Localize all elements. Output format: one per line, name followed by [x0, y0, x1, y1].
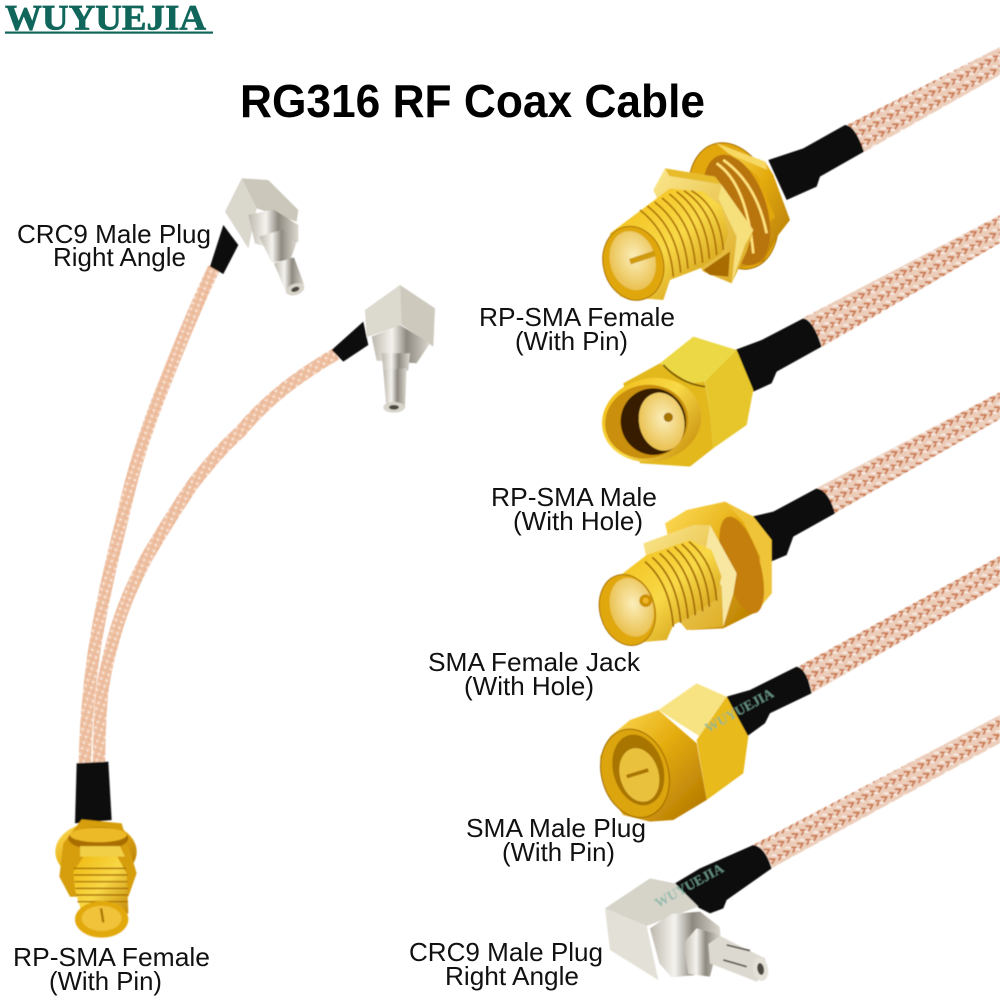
label: RP-SMA male [491, 482, 657, 536]
heat shrink sleeve [727, 667, 812, 737]
label: RP-SMA male: (With Hole) [513, 506, 643, 536]
label: SMA female jack: SMA Female Jack [428, 647, 641, 677]
label: RP-SMA male: RP-SMA Male [491, 482, 657, 512]
label: RP-SMA female: (With Pin) [515, 326, 628, 356]
label: CRC9 bottom: Right Angle [445, 961, 579, 991]
heat shrink sleeve [768, 125, 864, 200]
heat shrink sleeve [752, 488, 835, 563]
top CRC9 plug [210, 178, 306, 298]
cable: upper branch [85, 268, 214, 765]
label: CRC9 bottom: CRC9 Male Plug [409, 937, 603, 967]
title: RG316 RF Coax Cable [240, 75, 705, 127]
label: SMA female jack [428, 647, 641, 701]
label: RP-SMA female bottom left [13, 942, 210, 996]
braided cable [817, 392, 1000, 513]
braided cable [847, 47, 1000, 152]
watermark: WUYUEJIA [653, 861, 727, 911]
heat shrink sleeve [735, 318, 822, 392]
cable: lower branch [99, 354, 336, 765]
label: CRC9 bottom [409, 937, 603, 991]
second CRC9 plug [332, 285, 435, 413]
bottom RP-SMA female connector [55, 762, 137, 938]
heat shrink sleeve [675, 845, 772, 913]
connector [591, 683, 748, 826]
Y splitter cable assembly [55, 178, 435, 938]
watermark: WUYUEJIA [703, 686, 777, 736]
braided cable [797, 556, 1000, 693]
cable assembly 4: SMA male plug [591, 556, 1000, 826]
cable assembly 5: CRC9 male plug [605, 715, 1000, 982]
label: CRC9 top left [17, 219, 211, 272]
label: SMA male plug: (With Pin) [502, 837, 615, 867]
label: RP-SMA female bottom left: (With Pin) [49, 966, 162, 996]
label: SMA female jack: (With Hole) [464, 671, 594, 701]
cable assembly 2: RP-SMA male [594, 215, 1000, 471]
label: SMA male plug [466, 813, 646, 867]
plug [650, 912, 770, 982]
connector [595, 131, 794, 307]
braided cable [803, 215, 1000, 347]
label: CRC9 top left: CRC9 Male Plug [17, 219, 211, 249]
cable assembly 3: SMA female jack [591, 392, 1000, 652]
label: CRC9 top left: Right Angle [53, 242, 186, 272]
cable assembly 1: RP-SMA female [595, 47, 1000, 307]
connector [591, 502, 773, 652]
right-angle block [605, 878, 698, 980]
label: RP-SMA female: RP-SMA Female [479, 302, 675, 332]
connector [594, 337, 753, 471]
label: SMA male plug: SMA Male Plug [466, 813, 646, 843]
braided cable [753, 715, 1000, 868]
label: RP-SMA female [479, 302, 675, 356]
label: RP-SMA female bottom left: RP-SMA Female [13, 942, 210, 972]
